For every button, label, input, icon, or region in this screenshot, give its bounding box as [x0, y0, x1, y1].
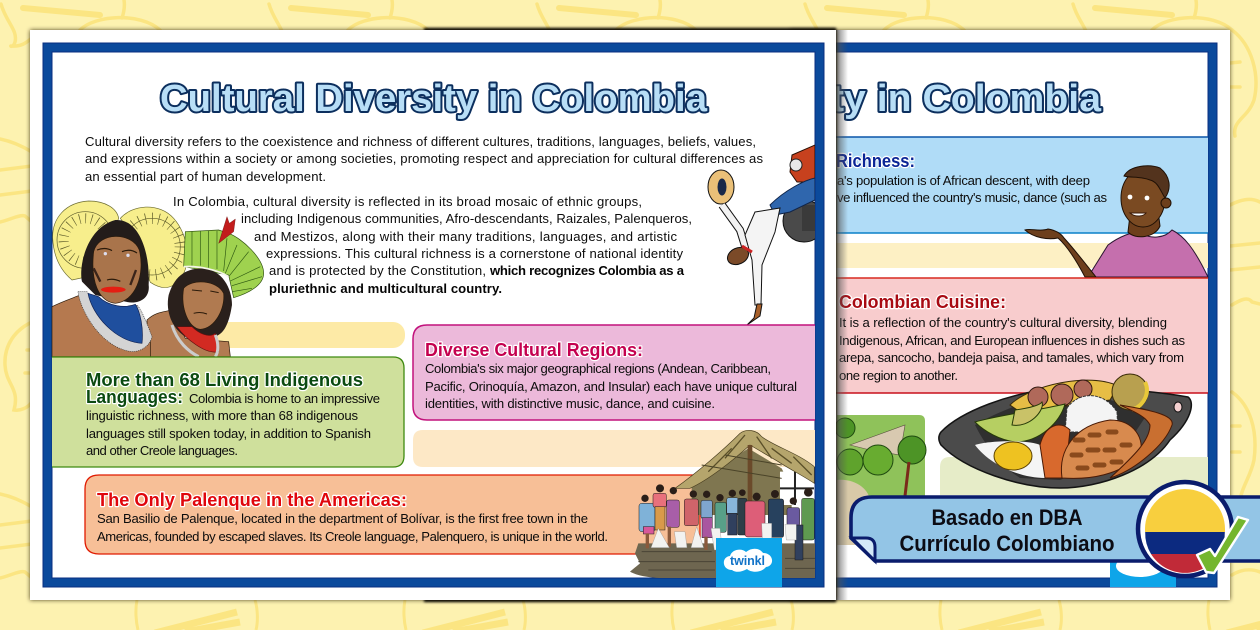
banner: Basado en DBA: Currículo Colombiano	[900, 531, 1114, 556]
front card	[30, 28, 836, 602]
badge: Colombian flag	[1138, 482, 1232, 576]
twinkl logo back	[1110, 555, 1176, 587]
back title: ty in Colombia	[831, 78, 1102, 120]
logo: twinkl	[716, 538, 782, 587]
Colombia paragraph: and Mestizos, along with their many traditions, languages, and artistic	[254, 229, 677, 244]
intro text: an essential part of human development.	[85, 169, 326, 184]
shadow from the front card	[836, 30, 848, 600]
Colombia paragraph: and is protected by the Constitution,	[269, 263, 486, 278]
intro text: Cultural diversity refers to the coexistence and richness of different cultures, traditions, languages, beliefs, values,	[85, 134, 756, 149]
Colombia paragraph: pluriethnic and multicultural country.	[269, 281, 502, 296]
panel: The Only Palenque in the Americas: San Basilio de Palenque, located in the department of Bolívar, is the first free town in the	[97, 511, 588, 526]
panel: More than 68 Living Indigenous Languages: Colombia is home to an impressive	[189, 391, 380, 406]
panel: More than 68 Living Indigenous Languages	[52, 357, 404, 467]
panel: Diverse Cultural Regions: Colombia's six major geographical regions (Andean, Caribbean,	[425, 361, 771, 376]
panel: More than 68 Living Indigenous Languages: More than 68 Living Indigenous	[86, 370, 363, 390]
second person	[147, 267, 232, 357]
banner: Basado en DBA	[851, 497, 1260, 561]
panel: More than 68 Living Indigenous Languages: and other Creole languages.	[86, 443, 238, 458]
panel: More than 68 Living Indigenous Languages: Languages:	[86, 387, 183, 407]
panel: Colombian cuisine: It is a reflection of the country's cultural diversity, blending	[839, 315, 1167, 330]
left yellow feather headdress	[53, 201, 187, 288]
intro text	[85, 134, 763, 184]
panel: African richness: ve influenced the country's music, dance (such as	[837, 190, 1107, 205]
illustration: smiling man	[1025, 166, 1208, 277]
panel: African richness: a's population is of African descent, with deep	[837, 173, 1090, 188]
panel: Colombian cuisine: Colombian Cuisine:	[839, 292, 1006, 312]
panel: The Only Palenque in the Americas: Americas, founded by escaped slaves. Its Creole language, Palenquero, is unique in the world.	[97, 529, 608, 544]
illustration: bandeja paisa plate	[939, 374, 1191, 488]
panel: Diverse Cultural Regions: Diverse Cultural Regions:	[425, 340, 643, 360]
front frame	[43, 43, 824, 587]
cream stripe	[800, 243, 1208, 268]
back card	[790, 30, 1230, 600]
panel: Diverse Cultural Regions: identities, with distinctive music, dance, and cuisine.	[425, 396, 715, 411]
logo: twinkl: twinkl	[730, 554, 765, 568]
intro text: and expressions within a society or among societies, promoting respect and appreciation for cultural differences as	[85, 151, 763, 166]
pale green box	[940, 457, 1208, 495]
Colombia paragraph: including Indigenous communities, Afro-descendants, Raizales, Palenqueros,	[241, 211, 692, 226]
Colombia paragraph	[173, 194, 692, 296]
cream panel	[413, 430, 815, 467]
panel: More than 68 Living Indigenous Languages: linguistic richness, with more than 68 indigenous	[86, 408, 358, 423]
panel: Diverse Cultural Regions	[413, 325, 815, 420]
first person	[52, 220, 152, 357]
illustration: dancer and jeep	[708, 145, 825, 325]
Colombia paragraph: which recognizes Colombia as a	[489, 263, 685, 278]
banner: Basado en DBA: Basado en DBA	[932, 505, 1083, 530]
green feather headdress	[184, 217, 264, 298]
icon: check mark	[1197, 517, 1248, 573]
panel: African richness	[800, 137, 1208, 233]
panel: Colombian cuisine	[800, 278, 1208, 393]
panel: Colombian cuisine: Indigenous, African, and European influences in dishes such as	[839, 333, 1185, 348]
crowd	[639, 493, 814, 560]
illustration: palenque hut and people	[630, 430, 817, 578]
cream pill	[215, 322, 405, 348]
panel: African richness: Richness:	[836, 151, 915, 171]
Colombia paragraph: In Colombia, cultural diversity is reflected in its broad mosaic of ethnic groups,	[173, 194, 642, 209]
illustration: Indigenous people	[52, 201, 264, 357]
illustration: landscape map	[835, 415, 926, 545]
panel: Colombian cuisine: arepa, sancocho, bandeja paisa, and tamales, which vary from	[839, 350, 1184, 365]
panel: More than 68 Living Indigenous Languages: languages still spoken today, in addition to Spanish	[86, 426, 371, 441]
panel: The Only Palenque in the Americas: The Only Palenque in the Americas:	[97, 490, 407, 510]
back frame	[790, 43, 1217, 587]
title: Cultural Diversity in Colombia	[160, 78, 708, 120]
panel: The Only Palenque in the Americas	[85, 475, 700, 554]
Colombia paragraph: expressions. This cultural richness is a cornerstone of national identity	[266, 246, 683, 261]
panel: Colombian cuisine: one region to another.	[839, 368, 958, 383]
panel: Diverse Cultural Regions: Pacific, Orinoquía, Amazon, and Insular) each have unique cultural	[425, 379, 797, 394]
